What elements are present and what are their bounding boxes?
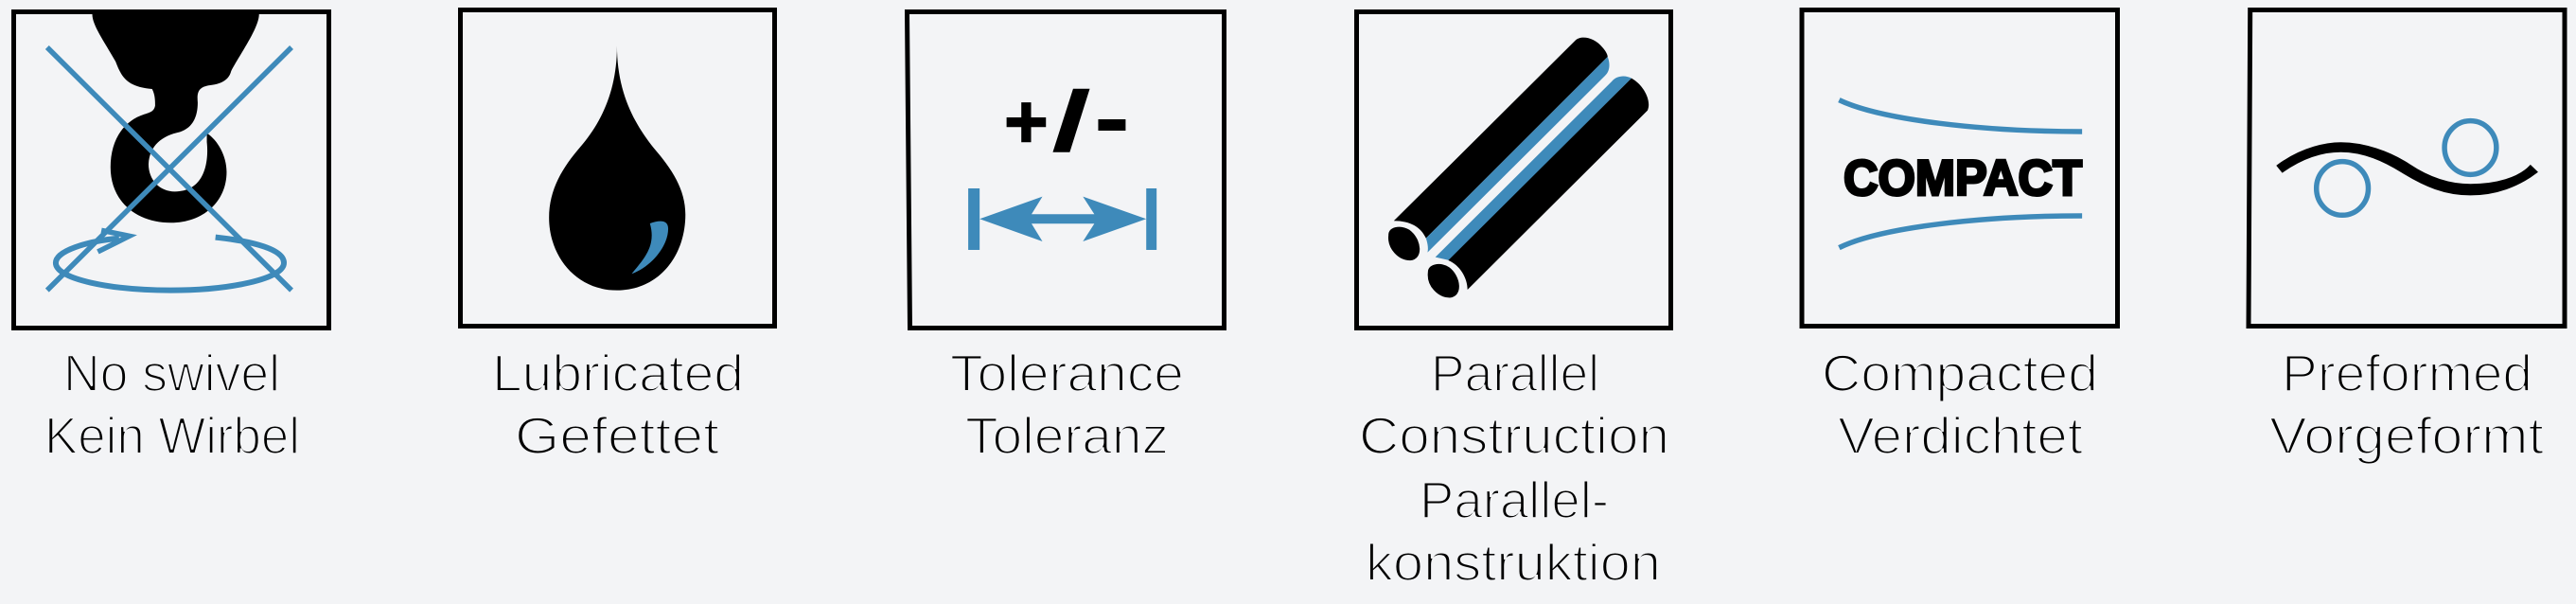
label: Vorgeformt: Vorgeformt: [2269, 406, 2544, 465]
icon: oil drop: [549, 45, 685, 291]
frame: [907, 11, 1225, 328]
panel: parallel construction: [1357, 11, 1671, 592]
label: Toleranz: Toleranz: [965, 406, 1169, 465]
frame: [1357, 11, 1671, 328]
panel: tolerance: [907, 11, 1225, 465]
frame: [13, 11, 329, 328]
panel: compacted: [1802, 9, 2118, 465]
icon: preformed wire wave with strands: [2277, 121, 2537, 215]
icon: compression curves: [1839, 100, 2082, 248]
icon: parallel strands: [1387, 38, 1649, 299]
label: Compacted: Compacted: [1822, 344, 2098, 402]
frame: [1802, 9, 2118, 326]
icon: plus/minus symbol: /: [1051, 75, 1091, 169]
icon: crossed-out swivel hook: [47, 14, 291, 291]
panel: preformed: [2249, 9, 2565, 465]
frame: [460, 9, 774, 326]
label: Preformed: Preformed: [2282, 344, 2532, 402]
label: No swivel: No swivel: [63, 344, 280, 402]
label: Construction: Construction: [1359, 406, 1669, 465]
label: Parallel: Parallel: [1431, 344, 1599, 402]
icon: COMPACT wordmark: COMPACT: [1844, 151, 2082, 206]
label: Lubricated: Lubricated: [492, 344, 744, 402]
panel: no swivel: [13, 11, 329, 465]
label: Verdichtet: Verdichtet: [1838, 406, 2083, 465]
icon: plus/minus symbol: +: [1004, 80, 1049, 164]
icon: plus/minus symbol: -: [1094, 64, 1130, 170]
label: Tolerance: Tolerance: [950, 344, 1184, 402]
label: Kein Wirbel: Kein Wirbel: [44, 406, 300, 465]
label: konstruktion: konstruktion: [1366, 533, 1661, 592]
icon: dimension arrow: [968, 188, 1156, 250]
panel: lubricated: [460, 9, 774, 465]
frame: [2249, 9, 2565, 326]
label: Parallel-: Parallel-: [1420, 471, 1609, 529]
icon: plus/minus symbol: [1004, 64, 1130, 170]
label: Gefettet: Gefettet: [515, 406, 719, 465]
